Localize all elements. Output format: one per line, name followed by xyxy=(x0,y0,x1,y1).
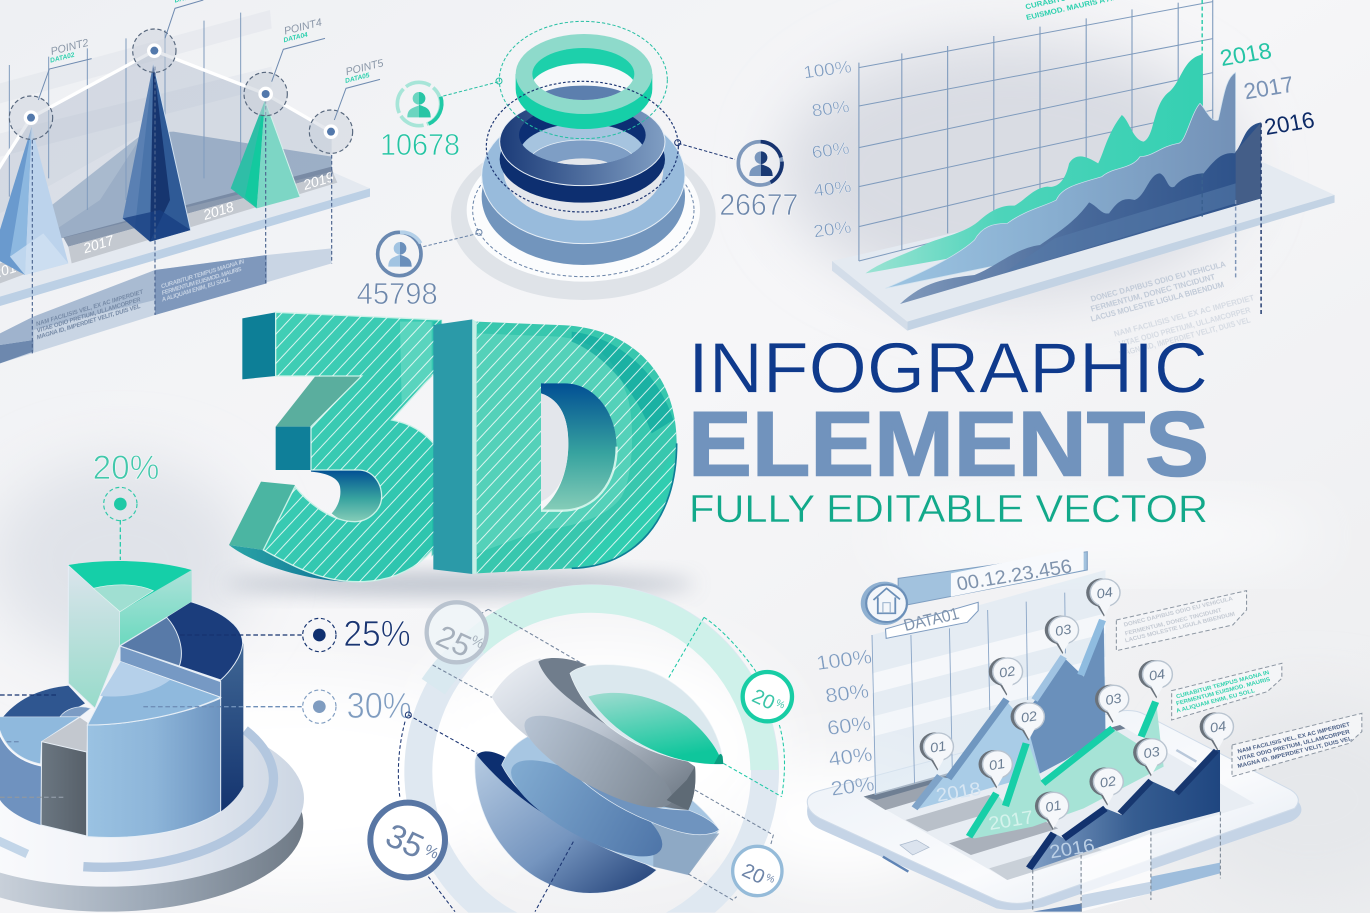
home button and speaker xyxy=(883,750,1196,872)
series 2017: 2017 xyxy=(987,807,1035,835)
subheading: FULLY EDITABLE VECTOR xyxy=(689,488,1208,531)
axis labels: 20% xyxy=(829,773,876,800)
axis labels xyxy=(802,57,853,241)
badge 25%: % xyxy=(469,632,487,651)
point labels: POINT2 xyxy=(49,37,90,58)
axis labels: 60% xyxy=(826,712,872,740)
callout 3 xyxy=(1232,713,1362,777)
area 2018 xyxy=(865,54,1203,273)
badge 35%: % xyxy=(422,842,442,863)
under-tablet strips xyxy=(1033,833,1220,912)
pins: 04 xyxy=(1209,718,1228,735)
callout 1: FERMENTUM, DONEC TINCIDUNT xyxy=(1124,608,1223,637)
caption text: DONEC DAPIBUS ODIO EU VEHICULA xyxy=(1089,259,1227,304)
label 25%: 25% xyxy=(343,613,411,654)
axis labels: 20% xyxy=(812,217,853,241)
small captions: NAM FACILISIS VEL, EX AC IMPERDIET xyxy=(35,289,145,328)
back planes xyxy=(0,10,332,290)
year labels: 2017 xyxy=(1242,73,1296,105)
point labels: DATA02 xyxy=(49,52,76,65)
badge 35%: 35 xyxy=(380,817,429,866)
label 30% xyxy=(303,685,412,726)
panel: 3D pie chart bottom left xyxy=(0,449,412,912)
3D letters xyxy=(229,312,677,582)
dashed guides xyxy=(398,609,784,912)
heading: infographic: INFOGRAPHIC xyxy=(688,330,1208,408)
pins: 01 xyxy=(1044,797,1063,815)
panel: stacked rings with user counters xyxy=(357,21,798,311)
small captions: VITAE ODIO PRETIUM, ULLAMCORPER xyxy=(36,297,142,335)
caption text: LACUS MOLESTIE LIGULA BIBENDUM xyxy=(1089,279,1225,324)
small captions: FERMENTUM EUISMOD. MAURIS xyxy=(161,267,243,297)
caption text: VITAE ODIO PRETIUM, ULLAMCORPER xyxy=(1118,305,1252,349)
teal cap xyxy=(570,665,723,764)
pins: 02 xyxy=(1098,773,1117,790)
grid verticals xyxy=(9,13,241,210)
axis labels xyxy=(815,646,876,800)
callout 1: DONEC DAPIBUS ODIO EU VEHICULA xyxy=(1123,596,1234,629)
base disc xyxy=(0,710,304,912)
counter 45798 xyxy=(357,232,438,311)
axis labels: 60% xyxy=(810,138,851,162)
data flag xyxy=(885,602,978,638)
teal wedge xyxy=(68,561,192,708)
year labels: 2018 xyxy=(1218,39,1274,72)
callout 2: FERMENTUM EUISMOD. MAURIS xyxy=(1176,677,1271,707)
sphere lower shell xyxy=(475,755,657,893)
series 2018 xyxy=(915,620,1105,809)
dashed drop lines xyxy=(1033,812,1220,912)
callout 2 xyxy=(1172,663,1282,720)
lower sheet xyxy=(0,248,332,363)
counter 10678: 10678 xyxy=(380,128,460,162)
badge 20% blue: 20 xyxy=(739,860,768,889)
badge 25% xyxy=(427,602,487,664)
navy ring xyxy=(499,110,666,203)
pins: 01 xyxy=(988,755,1006,773)
pins xyxy=(920,578,1233,830)
counter 26677 xyxy=(719,142,798,222)
heading: elements: ELEMENTS xyxy=(688,394,1209,496)
slab xyxy=(0,167,370,306)
connector lines xyxy=(423,78,735,247)
badge 20% teal xyxy=(743,672,792,721)
year labels xyxy=(1218,39,1317,141)
badge 25%: 25 xyxy=(431,619,476,664)
callout 3: MAGNA ID, IMPERDIET VELIT, DUIS VEL xyxy=(1237,736,1353,770)
data points xyxy=(9,29,353,153)
axis labels: 80% xyxy=(810,97,851,120)
callout 3: VITAE ODIO PRETIUM, ULLAMCORPER xyxy=(1237,729,1351,763)
point labels: DATA05 xyxy=(344,72,371,85)
badge 20% blue: % xyxy=(764,872,777,886)
callout 1: LACUS MOLESTIE LIGULA BIBENDUM xyxy=(1124,612,1236,644)
year labels: 2016 xyxy=(1263,108,1317,141)
letter D face xyxy=(477,322,677,573)
panel: area chart top right xyxy=(802,0,1335,359)
small captions: MAGNA ID, IMPERDIET VELIT, DUIS VEL xyxy=(36,304,142,341)
teal floating ring xyxy=(516,34,652,129)
letter D stem side xyxy=(433,319,472,574)
middle blue layer xyxy=(499,730,719,875)
series 2017 xyxy=(969,702,1164,838)
pyramid light blue xyxy=(0,127,68,275)
dashed drop lines xyxy=(32,67,332,353)
pins: 04 xyxy=(1095,584,1114,601)
year labels xyxy=(0,168,336,281)
callout 2: A ALIQUAM ENIM, EU SOLL xyxy=(1176,688,1256,715)
year labels: 2017 xyxy=(80,231,117,256)
light blue ring xyxy=(482,107,685,265)
data flag: DATA01 xyxy=(901,604,961,635)
panel: pyramid line chart top left xyxy=(0,0,385,363)
pyramid navy xyxy=(123,63,191,242)
year labels: 2019 xyxy=(300,168,336,193)
area 2016 xyxy=(900,122,1261,304)
panel: sliced sphere xyxy=(370,584,792,913)
light blue wedge xyxy=(87,662,221,837)
badge 20% blue xyxy=(733,846,782,896)
axis labels: 40% xyxy=(827,743,874,771)
address bar: 00.12.23.456 xyxy=(955,556,1074,595)
badge 20% teal: % xyxy=(774,698,787,712)
panel: tablet area chart xyxy=(807,547,1362,912)
small captions xyxy=(35,259,246,341)
navy slit xyxy=(477,751,638,860)
pyramid teal xyxy=(231,100,300,208)
counter 10678 xyxy=(380,82,460,162)
outer ring xyxy=(404,584,779,913)
point labels: DATA04 xyxy=(283,31,309,44)
point labels: POINT5 xyxy=(344,57,385,78)
dashed connectors xyxy=(0,520,302,797)
navy wedge xyxy=(120,602,243,812)
small captions: A ALIQUAM ENIM, EU SOLL xyxy=(160,277,232,304)
pins: 03 xyxy=(1142,743,1161,761)
tablet body xyxy=(807,711,1301,910)
pins: 03 xyxy=(1054,621,1073,639)
chart backdrop xyxy=(872,570,1105,795)
caption text: NAM FACILISIS VEL EX AC IMPERDIET xyxy=(1113,292,1256,339)
pins: 02 xyxy=(1020,708,1039,725)
axis labels: 100% xyxy=(815,646,873,675)
label 25% xyxy=(303,613,411,654)
small captions: CURABITUR TEMPUS MAGNA IN xyxy=(160,259,246,290)
badge 20% teal: 20 xyxy=(749,685,778,715)
letter 3 extrusion xyxy=(229,312,362,582)
pins: 01 xyxy=(929,738,947,755)
callout 1 xyxy=(1116,591,1247,651)
3D shadow xyxy=(225,573,695,595)
white trend line xyxy=(0,51,331,172)
series 2016: 2016 xyxy=(1048,835,1096,863)
letter 3 notch xyxy=(311,470,382,522)
series 2018: 2018 xyxy=(934,778,983,806)
pins: 04 xyxy=(1148,666,1167,683)
point labels: POINT4 xyxy=(283,17,323,38)
title xyxy=(688,330,1209,531)
letter 3 face xyxy=(263,312,452,582)
area 2017 xyxy=(885,72,1236,288)
badge 35% xyxy=(370,803,445,877)
left blue wedge xyxy=(0,686,91,825)
label 20%: 20% xyxy=(93,449,159,487)
year labels: 2018 xyxy=(200,198,236,223)
pins: 02 xyxy=(998,663,1017,680)
callout 3: NAM FACILISIS VEL, EX AC IMPERDIET xyxy=(1237,722,1351,755)
tablet screen xyxy=(864,725,1255,880)
slab xyxy=(832,162,1335,331)
axis labels: 100% xyxy=(802,57,853,82)
label 30%: 30% xyxy=(347,685,412,726)
base grey ring xyxy=(451,133,716,300)
label 20% xyxy=(93,449,159,521)
caption text: MAGNA ID, IMPERDIET VELIT, DUIS VEL xyxy=(1118,315,1252,359)
grey band xyxy=(492,658,695,824)
point labels xyxy=(49,0,385,85)
counter 45798: 45798 xyxy=(357,277,438,311)
counter 26677: 26677 xyxy=(719,188,798,222)
axis labels: 40% xyxy=(812,177,853,200)
series 2016 xyxy=(1027,750,1220,870)
pins: 03 xyxy=(1104,690,1123,708)
grey wedge xyxy=(41,718,87,836)
dashed drop lines xyxy=(1202,0,1261,315)
grid xyxy=(859,0,1213,261)
dashed orbit circles xyxy=(486,21,678,212)
callout 2: CURABITUR TEMPUS MAGNA IN xyxy=(1176,670,1270,700)
caption text xyxy=(1089,259,1256,359)
address bar xyxy=(861,547,1087,625)
point leaders xyxy=(38,0,380,120)
axis labels: 80% xyxy=(824,680,870,707)
caption text: FERMENTUM, DONEC TINCIDUNT xyxy=(1089,271,1217,314)
